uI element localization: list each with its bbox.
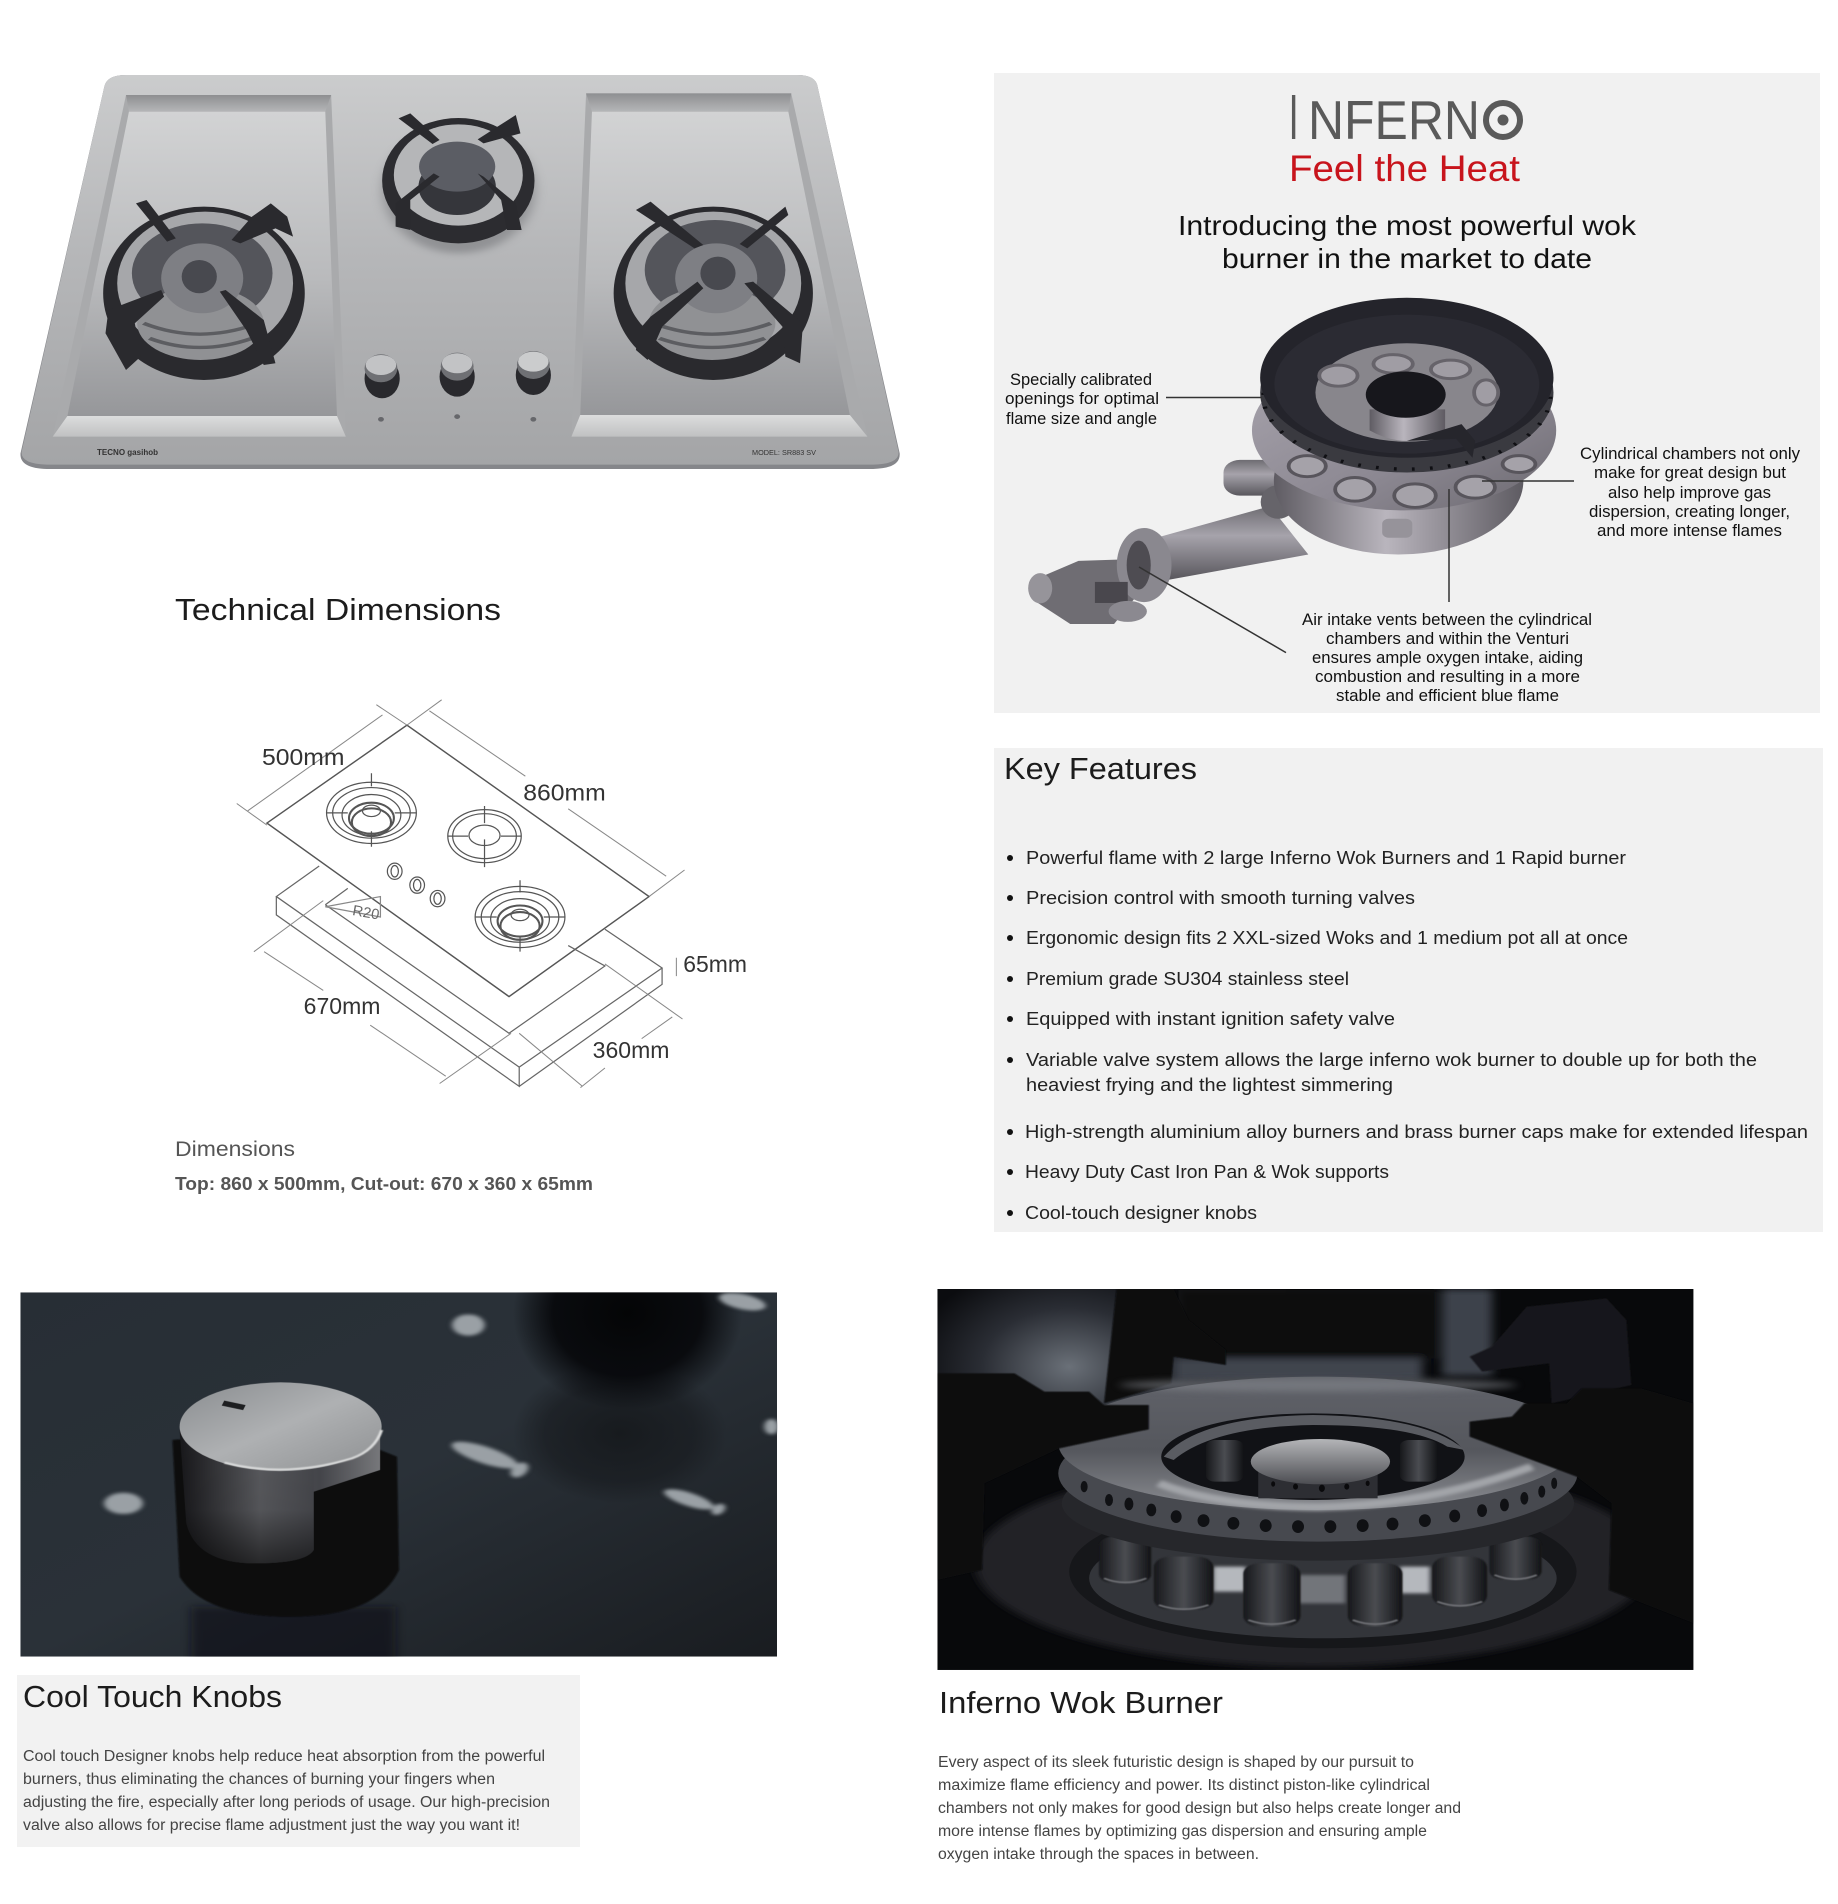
knobs description: valve also allows for precise flame adjustment just the way you want it! bbox=[23, 1817, 520, 1834]
flange bbox=[1252, 350, 1556, 510]
dimension guides bbox=[237, 700, 685, 1088]
outer chambers bbox=[1289, 456, 1535, 507]
dimension labels: R20 bbox=[351, 903, 380, 924]
callout: air intake: chambers and within the Venturi bbox=[1326, 630, 1569, 648]
front pan supports bbox=[937, 1373, 1149, 1580]
lower chamber disc bbox=[1070, 1532, 1576, 1648]
knob cylinder bbox=[180, 1427, 380, 1563]
tagline: Feel the Heat bbox=[1289, 148, 1521, 189]
knobs description: burners, thus eliminating the chances of burning your fingers when bbox=[23, 1771, 495, 1788]
logo: inferno: I bbox=[1289, 81, 1299, 153]
ring band bbox=[1063, 1492, 1574, 1560]
bullet markers bbox=[1007, 855, 1013, 1216]
blurred rear knob bbox=[521, 1292, 734, 1488]
callout: cylindrical chambers: and more intense flames bbox=[1597, 522, 1782, 540]
text: inferno wok burner description: oxygen intake through the spaces in between. bbox=[938, 1846, 1259, 1863]
photo: cool touch knob bbox=[20, 1292, 778, 1657]
rear background bbox=[1174, 1289, 1492, 1380]
chambers bbox=[1099, 1537, 1542, 1627]
text: inferno wok burner description: chambers not only makes for good design but also helps create longer and bbox=[938, 1800, 1461, 1817]
knob top bbox=[180, 1382, 382, 1471]
panel: cool touch knobs bbox=[17, 1675, 580, 1847]
heading: technical dimensions: Technical Dimensions bbox=[175, 592, 501, 627]
dimension line drawing bbox=[237, 700, 747, 1088]
dimension labels bbox=[262, 744, 747, 1063]
rear pan supports bbox=[1104, 1289, 1226, 1403]
feature list: Precision control with smooth turning valves bbox=[1026, 887, 1415, 908]
callout: cylindrical chambers: make for great design but bbox=[1594, 464, 1786, 482]
blurred hob markings bbox=[104, 1289, 779, 1516]
burner illustration bbox=[1028, 298, 1556, 624]
callout: openings: flame size and angle bbox=[1006, 410, 1157, 428]
centre cap bbox=[1370, 409, 1445, 441]
right recess bbox=[571, 93, 867, 437]
right wok burner bbox=[614, 202, 813, 380]
callout: air intake: Air intake vents between the cylindrical bbox=[1302, 611, 1592, 629]
left recess bbox=[53, 95, 346, 437]
text: inferno wok burner description: more intense flames by optimizing gas dispersion and ensuring ample bbox=[938, 1823, 1427, 1840]
dimensions caption bbox=[175, 1138, 593, 1194]
feature list: heaviest frying and the lightest simmering bbox=[1026, 1074, 1393, 1095]
callout: cylindrical chambers: Cylindrical chambers not only bbox=[1580, 445, 1801, 463]
centre rapid burner bbox=[382, 113, 535, 253]
burner crown bbox=[1260, 313, 1553, 472]
dimension labels: 500mm bbox=[262, 744, 345, 770]
knobs description bbox=[23, 1748, 550, 1834]
callout: openings bbox=[1005, 371, 1262, 428]
venturi tube and nozzle bbox=[1028, 460, 1308, 624]
text: inferno wok burner description bbox=[938, 1754, 1461, 1863]
chamber highlights bbox=[1104, 1575, 1537, 1624]
burner rings bbox=[327, 773, 565, 952]
callout: cylindrical chambers bbox=[1482, 445, 1801, 540]
product photo: stainless steel gas hob bbox=[20, 75, 900, 469]
feature list: Powerful flame with 2 large Inferno Wok Burners and 1 Rapid burner bbox=[1026, 847, 1626, 868]
callout: air intake: ensures ample oxygen intake, aiding bbox=[1312, 649, 1583, 667]
indicator mark bbox=[222, 1401, 246, 1410]
caption values: Top: 860 x 500mm, Cut-out: 670 x 360 x 65mm bbox=[175, 1173, 593, 1194]
callout: air intake: combustion and resulting in a more bbox=[1315, 668, 1580, 686]
cut-out block bbox=[276, 866, 662, 1086]
hob top outline bbox=[267, 725, 649, 997]
callout: cylindrical chambers: dispersion, creating longer, bbox=[1589, 503, 1790, 521]
photo: inferno wok burner bbox=[937, 1289, 1693, 1670]
burner body bbox=[1274, 407, 1523, 555]
inner chambers bbox=[1319, 355, 1498, 405]
ring holes bbox=[1081, 1478, 1557, 1533]
model label: MODEL: SR883 SV bbox=[752, 450, 816, 457]
headline: Introducing the most powerful wok bbox=[1178, 210, 1637, 241]
text: inferno wok burner description: maximize flame efficiency and power. Its distinct piston-like cylindrical bbox=[938, 1777, 1430, 1794]
logo: inferno: NFERN bbox=[1308, 89, 1480, 151]
feature list: High-strength aluminium alloy burners and brass burner caps make for extended lifespan bbox=[1025, 1121, 1808, 1142]
ring top surface bbox=[1058, 1377, 1578, 1510]
knobs description: Cool touch Designer knobs help reduce heat absorption from the powerful bbox=[23, 1748, 545, 1765]
callout: openings: openings for optimal bbox=[1005, 390, 1159, 408]
light gaps bbox=[1213, 1567, 1430, 1603]
small knobs bbox=[387, 863, 445, 907]
callout: openings: Specially calibrated bbox=[1010, 371, 1152, 389]
R20 note bbox=[325, 897, 380, 917]
feature list: Premium grade SU304 stainless steel bbox=[1026, 968, 1349, 989]
feature list bbox=[1025, 847, 1808, 1223]
feature list: Ergonomic design fits 2 XXL-sized Woks and 1 medium pot all at once bbox=[1026, 927, 1628, 948]
cooktop surface bbox=[974, 1491, 1632, 1668]
feature list: Cool-touch designer knobs bbox=[1025, 1202, 1257, 1223]
knob reflection bbox=[191, 1607, 395, 1663]
text: inferno wok burner description: Every aspect of its sleek futuristic design is shaped by our pursuit to bbox=[938, 1754, 1414, 1771]
brand label: TECNO gasihob bbox=[97, 448, 158, 457]
callout: cylindrical chambers: also help improve gas bbox=[1608, 484, 1771, 502]
knob base bbox=[172, 1430, 399, 1617]
feature list: Heavy Duty Cast Iron Pan & Wok supports bbox=[1025, 1161, 1389, 1182]
centre cap bbox=[1251, 1439, 1390, 1498]
panel: key features bbox=[994, 748, 1823, 1232]
dimension labels: 670mm bbox=[304, 993, 380, 1019]
dimension labels: 860mm bbox=[523, 780, 606, 806]
feature list: Variable valve system allows the large inferno wok burner to double up for both the bbox=[1026, 1049, 1757, 1070]
headline: burner in the market to date bbox=[1222, 243, 1592, 274]
callout: air intake bbox=[1139, 489, 1592, 705]
panel: inferno burner bbox=[994, 73, 1820, 713]
dimension labels: 65mm bbox=[683, 951, 747, 977]
inner well bbox=[1161, 1413, 1465, 1500]
headline bbox=[1178, 210, 1637, 274]
heading: inferno wok burner: Inferno Wok Burner bbox=[939, 1685, 1223, 1720]
knobs heading: Cool Touch Knobs bbox=[23, 1679, 282, 1714]
left wok burner bbox=[103, 200, 305, 380]
knobs description: adjusting the fire, especially after long periods of usage. Our high-precision bbox=[23, 1794, 550, 1811]
control knobs bbox=[365, 351, 551, 422]
callout: air intake: stable and efficient blue flame bbox=[1336, 687, 1559, 705]
dimension labels: 360mm bbox=[593, 1037, 669, 1063]
key features heading: Key Features bbox=[1004, 751, 1197, 786]
caption label: Dimensions bbox=[175, 1138, 295, 1161]
feature list: Equipped with instant ignition safety valve bbox=[1026, 1008, 1395, 1029]
